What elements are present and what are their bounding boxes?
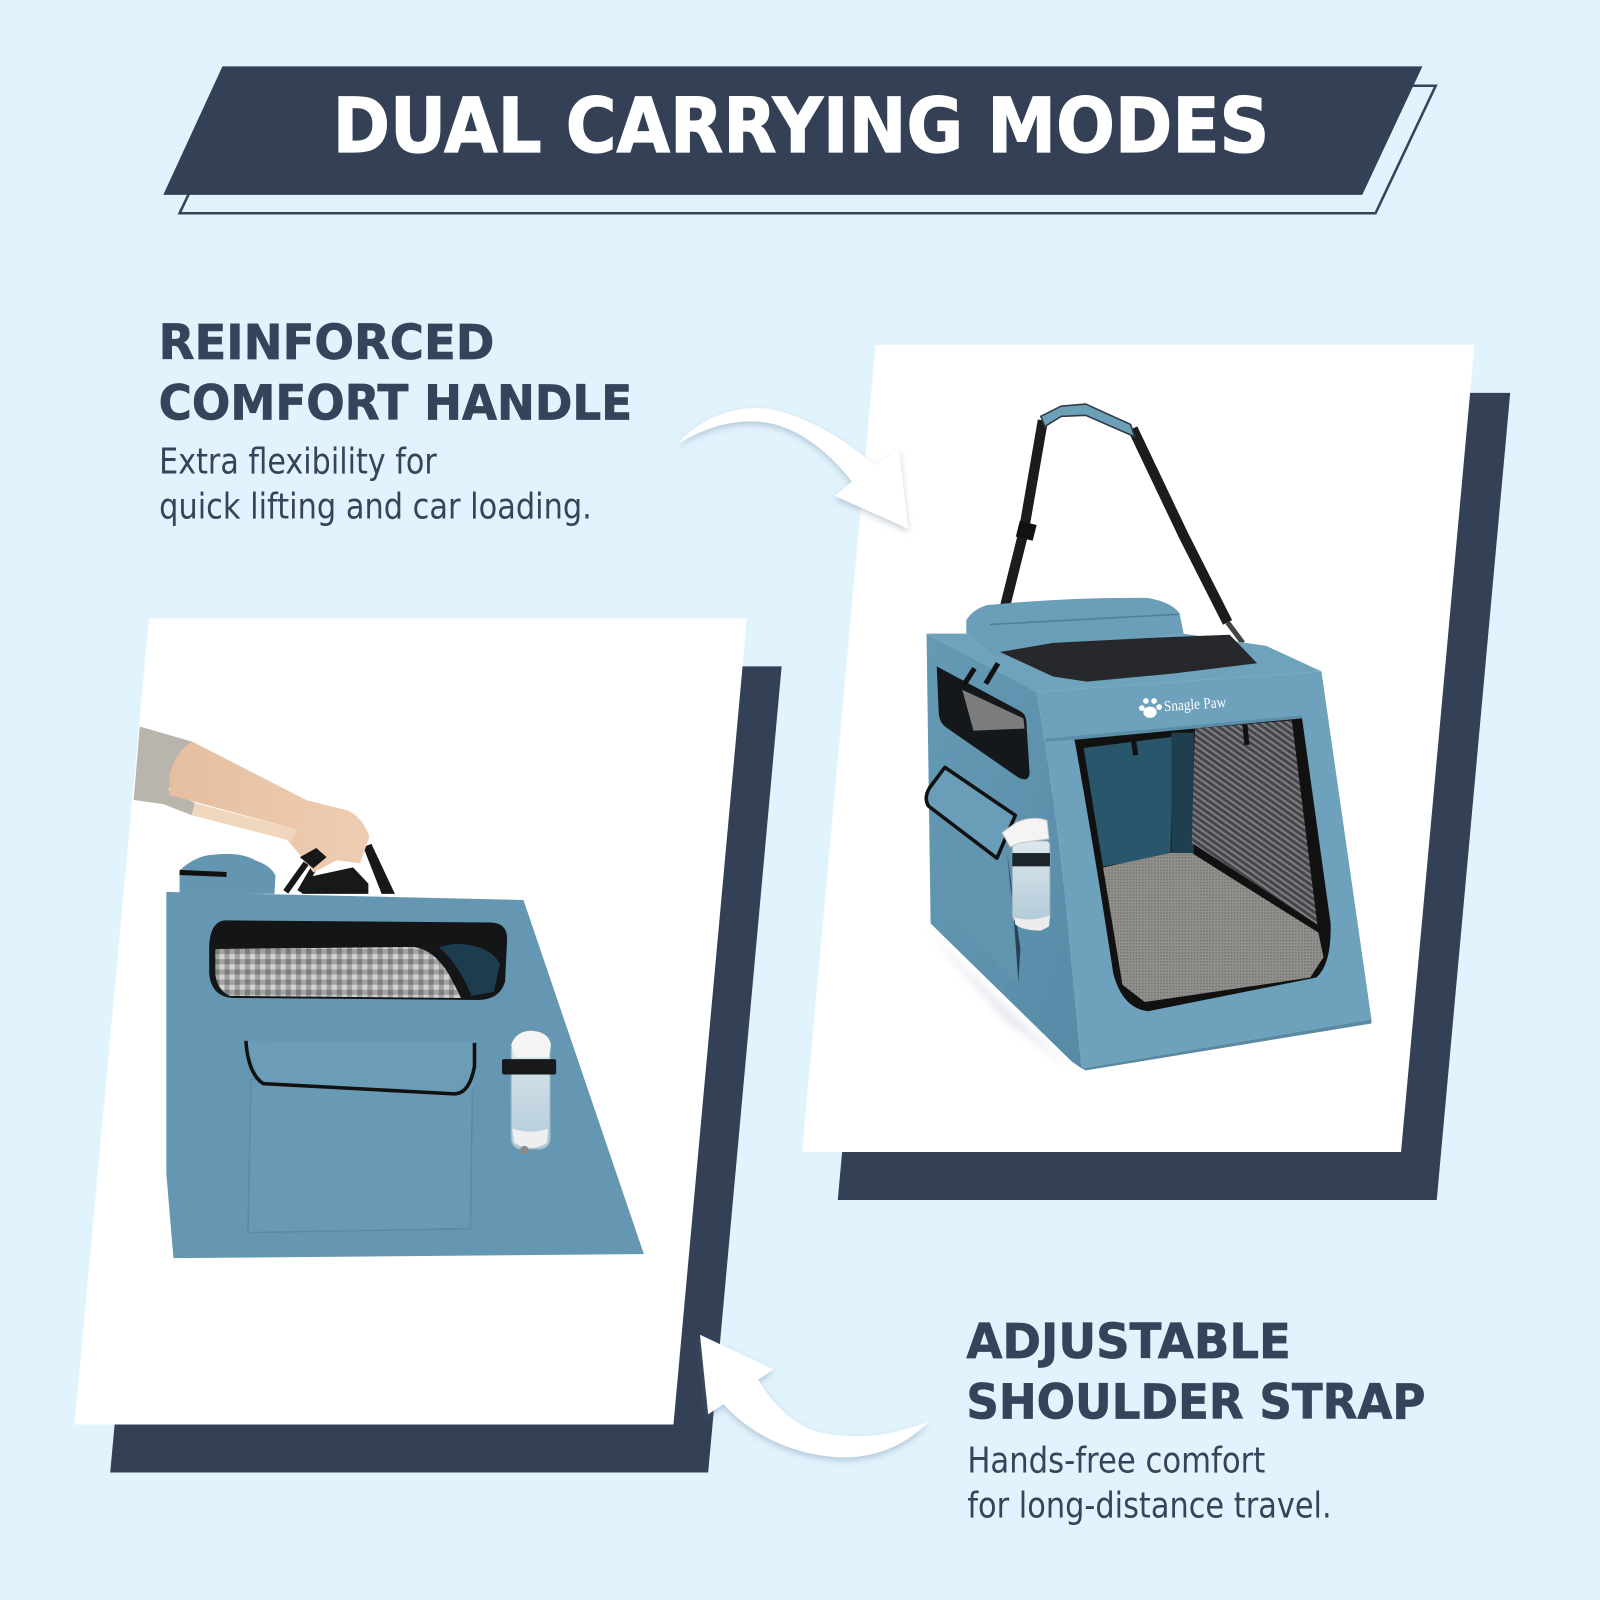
text block: reinforced comfort handle: quick lifting and car loading. bbox=[159, 486, 592, 527]
side pocket flap bbox=[926, 767, 1015, 858]
text block: reinforced comfort handle: COMFORT HANDLE bbox=[159, 375, 632, 431]
side window bbox=[209, 920, 507, 1000]
interior back wall bbox=[1084, 737, 1173, 886]
carrier: handheld bbox=[166, 844, 644, 1258]
shoulder strap bbox=[989, 404, 1243, 651]
side face bbox=[927, 634, 1082, 1068]
text block: adjustable shoulder strap: ADJUSTABLE bbox=[966, 1314, 1291, 1370]
text block: reinforced comfort handle bbox=[159, 315, 632, 527]
text block: adjustable shoulder strap: for long-distance travel. bbox=[967, 1485, 1332, 1526]
arrow: to shoulder strap photo bbox=[677, 408, 908, 529]
top face bbox=[927, 634, 1321, 692]
interior side mesh bbox=[1192, 720, 1317, 924]
text block: adjustable shoulder strap: Hands-free comfort bbox=[967, 1440, 1265, 1481]
panel: handle carry photo bbox=[74, 618, 782, 1472]
handles bbox=[286, 844, 395, 894]
text block: reinforced comfort handle: Extra flexibility for bbox=[159, 441, 437, 482]
pocket bbox=[246, 1041, 474, 1233]
arrow: to handle carry photo bbox=[700, 1335, 929, 1457]
top mesh panel bbox=[1000, 635, 1257, 682]
logo bbox=[1139, 694, 1227, 718]
text block: adjustable shoulder strap bbox=[966, 1314, 1426, 1526]
title banner: DUAL CARRYING MODES bbox=[333, 82, 1269, 170]
front opening bbox=[1074, 718, 1331, 1011]
storage bag on top bbox=[966, 598, 1184, 658]
arm holding handle bbox=[134, 727, 369, 872]
storage pouch bbox=[180, 854, 276, 894]
carrier side panel bbox=[166, 892, 644, 1258]
paw icon bbox=[1139, 698, 1162, 718]
text block: reinforced comfort handle: REINFORCED bbox=[159, 315, 494, 371]
interior floor mesh bbox=[1103, 853, 1323, 1002]
logo: Snagle Paw bbox=[1163, 694, 1227, 715]
side pocket bbox=[937, 806, 1018, 983]
text block: adjustable shoulder strap: SHOULDER STRAP bbox=[966, 1374, 1426, 1430]
interior hooks bbox=[1133, 724, 1247, 755]
panel: shoulder strap photo bbox=[802, 345, 1510, 1200]
water bottle bbox=[502, 1031, 556, 1154]
front face bbox=[1037, 671, 1371, 1068]
title banner bbox=[163, 66, 1436, 213]
water bottle bbox=[1002, 818, 1050, 931]
side window bbox=[937, 663, 1030, 779]
carrier: strapped crate bbox=[926, 404, 1371, 1070]
